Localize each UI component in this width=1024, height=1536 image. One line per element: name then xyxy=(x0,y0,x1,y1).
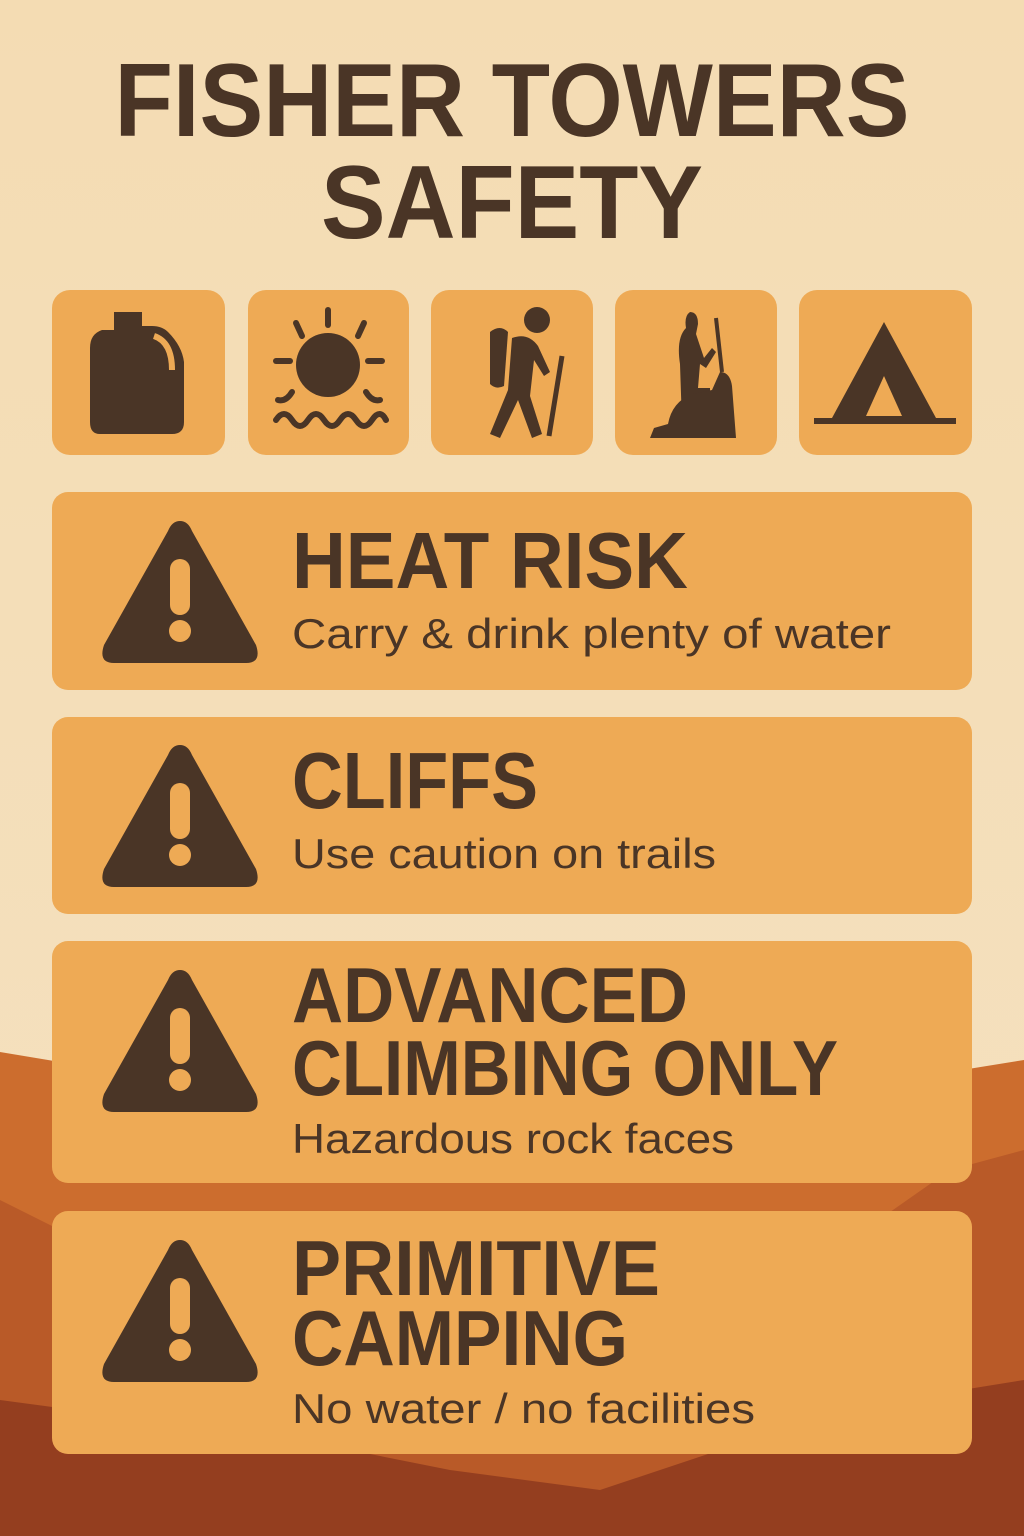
background mountains xyxy=(0,1040,1024,1536)
panel: heat risk xyxy=(52,492,972,690)
panel: heat risk: Carry & drink plenty of water xyxy=(292,610,891,657)
icon: tent xyxy=(799,290,972,455)
panel: advanced climbing xyxy=(52,941,972,1183)
icon: water jug xyxy=(52,290,225,455)
icon: warning xyxy=(102,745,258,887)
title: FISHER TOWERS xyxy=(114,43,910,159)
title: SAFETY xyxy=(321,145,703,261)
icon: sun xyxy=(248,290,409,455)
icon: hiker xyxy=(431,290,593,455)
panel: cliffs: CLIFFS xyxy=(292,736,538,825)
icon: warning xyxy=(102,970,258,1112)
icon row xyxy=(52,290,972,455)
icon: climber xyxy=(615,290,777,455)
title xyxy=(114,43,910,261)
panel: cliffs xyxy=(52,717,972,914)
panel: advanced climbing: Hazardous rock faces xyxy=(292,1115,734,1162)
panel: primitive camping: PRIMITIVE xyxy=(292,1224,660,1312)
panel: primitive camping: CAMPING xyxy=(292,1294,628,1382)
icon: warning xyxy=(102,1240,258,1382)
icon: warning xyxy=(102,521,258,663)
panel: advanced climbing: CLIMBING ONLY xyxy=(292,1024,838,1112)
panel: primitive camping: No water / no facilities xyxy=(292,1385,755,1432)
panel: heat risk: HEAT RISK xyxy=(292,516,688,605)
panel: primitive camping xyxy=(52,1211,972,1454)
panel: advanced climbing: ADVANCED xyxy=(292,951,688,1039)
panel: cliffs: Use caution on trails xyxy=(292,830,716,877)
